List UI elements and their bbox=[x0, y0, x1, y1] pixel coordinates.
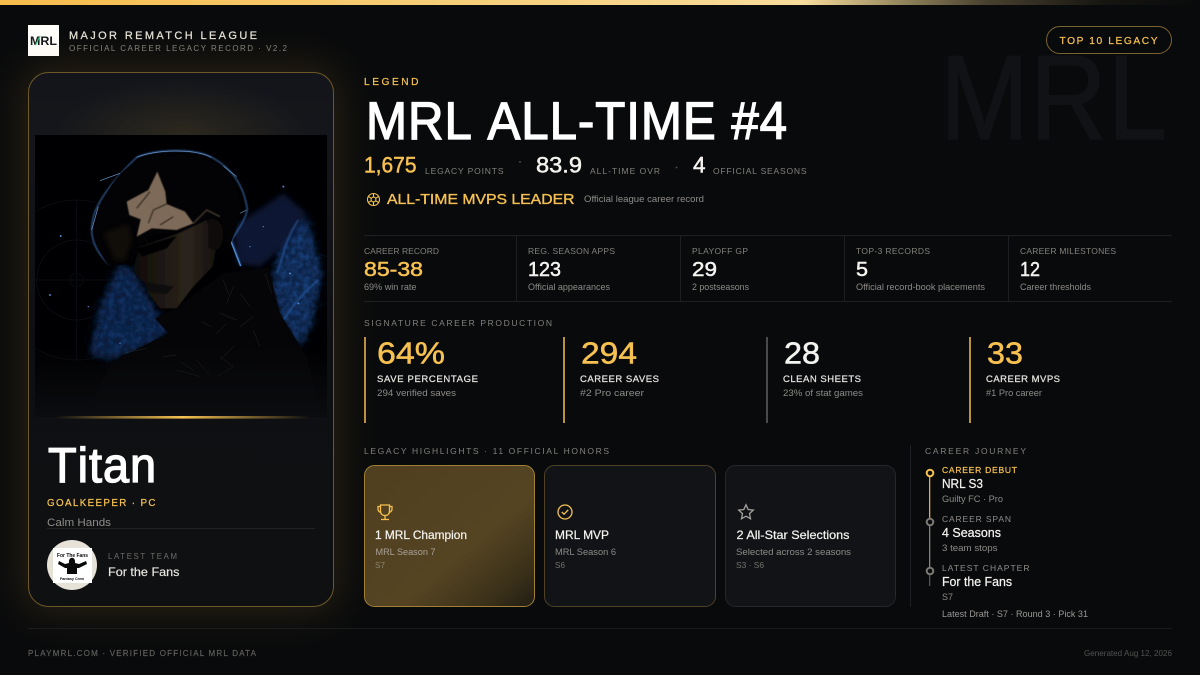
stat: all-time ovr: 83.9 bbox=[536, 152, 582, 178]
hair rim light bbox=[92, 151, 247, 266]
stat: official seasons: OFFICIAL SEASONS bbox=[713, 166, 807, 176]
portrait bottom fade bbox=[35, 370, 327, 416]
honor card: all-star: Selected across 2 seasons bbox=[736, 547, 851, 557]
metric: career mvps bbox=[969, 336, 1060, 423]
hair bbox=[98, 164, 240, 266]
face bbox=[133, 220, 217, 308]
journey: latest chapter: S7 bbox=[942, 592, 953, 602]
honor card: champion: S7 bbox=[375, 560, 385, 570]
signature production section bbox=[364, 318, 1060, 423]
career stat strip bbox=[364, 235, 1172, 302]
stat: regular season apps: Official appearances bbox=[528, 282, 610, 292]
league name: MAJOR REMATCH LEAGUE bbox=[69, 30, 257, 42]
stars bbox=[49, 186, 299, 344]
tier label: LEGEND bbox=[364, 77, 418, 88]
gold divider under portrait bbox=[55, 416, 310, 419]
icon: MRL logo: MRL bbox=[30, 36, 57, 48]
metric: career saves: CAREER SAVES bbox=[580, 374, 659, 385]
honor card: all-star: S3 · S6 bbox=[736, 560, 764, 570]
stat: playoff games: PLAYOFF GP bbox=[692, 246, 748, 256]
latest draft note: Latest Draft · S7 · Round 3 · Pick 31 bbox=[942, 609, 1088, 619]
stat: legacy points: 1,675 bbox=[364, 152, 416, 178]
stat: top-3 records: 5 bbox=[856, 258, 868, 281]
leader note: Official league career record bbox=[584, 194, 704, 204]
stat: regular season apps: REG. SEASON APPS bbox=[528, 246, 615, 256]
icon: star bbox=[739, 505, 753, 519]
icon: leader medallion bbox=[368, 194, 380, 206]
stat: playoff games: 29 bbox=[692, 258, 717, 281]
metric: save percentage bbox=[364, 336, 478, 423]
metric: save percentage: SAVE PERCENTAGE bbox=[377, 374, 478, 385]
metric: career mvps: #1 Pro career bbox=[986, 388, 1042, 398]
journey: latest chapter: LATEST CHAPTER bbox=[942, 563, 1030, 573]
stat: career record bbox=[364, 246, 439, 292]
journey: career debut: NRL S3 bbox=[942, 477, 983, 491]
career journey timeline bbox=[910, 445, 1088, 619]
stat: career milestones: Career thresholds bbox=[1020, 282, 1091, 292]
player card bbox=[0, 66, 340, 612]
honor card: champion: MRL Season 7 bbox=[376, 547, 436, 557]
badge: top 10 legacy: TOP 10 LEGACY bbox=[1060, 36, 1158, 47]
metric: career saves bbox=[563, 336, 659, 423]
footer bbox=[28, 628, 1172, 658]
metric: clean sheets: 28 bbox=[784, 336, 820, 370]
stat: career record: 85-38 bbox=[364, 258, 423, 281]
honor card: mvp bbox=[544, 466, 716, 606]
journey: career span bbox=[942, 514, 1011, 553]
top accent bar bbox=[0, 0, 1200, 5]
journey: latest chapter: For the Fans bbox=[942, 575, 1012, 589]
footer date: Generated Aug 12, 2026 bbox=[1084, 649, 1172, 658]
watermark: MRL: MRL bbox=[940, 29, 1168, 165]
honor card: champion: 1 MRL Champion bbox=[375, 528, 467, 542]
journey: latest chapter bbox=[942, 563, 1030, 602]
team logo bbox=[47, 540, 97, 590]
stat: regular season apps bbox=[528, 246, 615, 292]
stat: playoff games bbox=[692, 246, 749, 292]
stat: top-3 records bbox=[856, 246, 985, 292]
stat: top-3 records: Official record-book placements bbox=[856, 282, 985, 292]
stat: career record: 69% win rate bbox=[364, 282, 416, 292]
player position: GOALKEEPER · PC bbox=[47, 498, 156, 509]
metric: career mvps: CAREER MVPS bbox=[986, 374, 1060, 385]
player portrait bbox=[35, 135, 327, 390]
card glow bbox=[22, 66, 339, 612]
jacket bbox=[113, 274, 301, 362]
stat: playoff games: 2 postseasons bbox=[692, 282, 749, 292]
stat: all-time ovr: ALL-TIME OVR bbox=[590, 166, 660, 176]
metric: clean sheets: CLEAN SHEETS bbox=[783, 374, 861, 385]
timeline rail bbox=[927, 470, 933, 586]
honor card: champion bbox=[364, 466, 534, 606]
icon: trophy bbox=[378, 505, 392, 520]
headline: MRL ALL-TIME #4 bbox=[366, 92, 788, 151]
journey: career span: CAREER SPAN bbox=[942, 514, 1011, 524]
stat: regular season apps: 123 bbox=[528, 258, 561, 281]
journey: career debut: Guilty FC · Pro bbox=[942, 494, 1003, 504]
section heading: CAREER JOURNEY bbox=[925, 446, 1026, 456]
metric: career saves: #2 Pro career bbox=[580, 388, 644, 398]
honor card: mvp: MRL MVP bbox=[555, 528, 609, 542]
nebula bbox=[90, 263, 168, 360]
icon: check badge bbox=[558, 505, 572, 519]
player name: Titan bbox=[48, 439, 157, 493]
stat: legacy points: LEGACY POINTS bbox=[425, 166, 504, 176]
metric: save percentage: 294 verified saves bbox=[377, 388, 456, 398]
legacy highlights section bbox=[364, 446, 896, 606]
metric: career saves: 294 bbox=[581, 336, 637, 370]
stat: top-3 records: TOP-3 RECORDS bbox=[856, 246, 930, 256]
stat: career milestones: 12 bbox=[1020, 258, 1040, 281]
journey: career debut: CAREER DEBUT bbox=[942, 465, 1017, 475]
stat: official seasons: 4 bbox=[693, 152, 706, 178]
header: league brand bbox=[28, 25, 288, 56]
honor card: mvp: MRL Season 6 bbox=[555, 547, 616, 557]
metric: save percentage: 64% bbox=[377, 336, 445, 370]
section heading: SIGNATURE CAREER PRODUCTION bbox=[364, 318, 552, 328]
section heading: LEGACY HIGHLIGHTS · 11 OFFICIAL HONORS bbox=[364, 446, 609, 456]
team logo: For The Fans bbox=[57, 553, 88, 559]
stat: career record: CAREER RECORD bbox=[364, 246, 439, 256]
metric: clean sheets bbox=[766, 336, 863, 423]
team logo: Fantasy Crew bbox=[60, 577, 84, 581]
leader title: ALL-TIME MVPS LEADER bbox=[387, 191, 575, 208]
stat: career milestones bbox=[1020, 246, 1116, 292]
stat: all-time ovr bbox=[536, 152, 660, 178]
footer source: PLAYMRL.COM · VERIFIED OFFICIAL MRL DATA bbox=[28, 649, 257, 658]
blond hair highlight bbox=[127, 172, 220, 237]
honor card: all-star bbox=[726, 466, 896, 606]
player nickname: Calm Hands bbox=[47, 517, 112, 529]
journey: career span: 3 team stops bbox=[942, 543, 998, 553]
hero section bbox=[364, 77, 807, 208]
honor card: mvp: S6 bbox=[555, 560, 565, 570]
latest team name: For the Fans bbox=[108, 565, 180, 579]
icon: MRL logo bbox=[28, 25, 59, 56]
stat: career milestones: CAREER MILESTONES bbox=[1020, 246, 1116, 256]
metric: clean sheets: 23% of stat games bbox=[783, 388, 863, 398]
league subtitle: OFFICIAL CAREER LEGACY RECORD · V2.2 bbox=[69, 44, 288, 53]
latest team label: LATEST TEAM bbox=[108, 552, 177, 561]
honor card: all-star: 2 All-Star Selections bbox=[736, 528, 850, 542]
journey: career span: 4 Seasons bbox=[942, 526, 1001, 540]
card body bbox=[28, 72, 334, 606]
stat: official seasons bbox=[693, 152, 807, 178]
stat: legacy points bbox=[364, 152, 504, 178]
journey: career debut bbox=[942, 465, 1017, 504]
metric: career mvps: 33 bbox=[987, 336, 1023, 370]
badge: top 10 legacy bbox=[1046, 26, 1172, 54]
